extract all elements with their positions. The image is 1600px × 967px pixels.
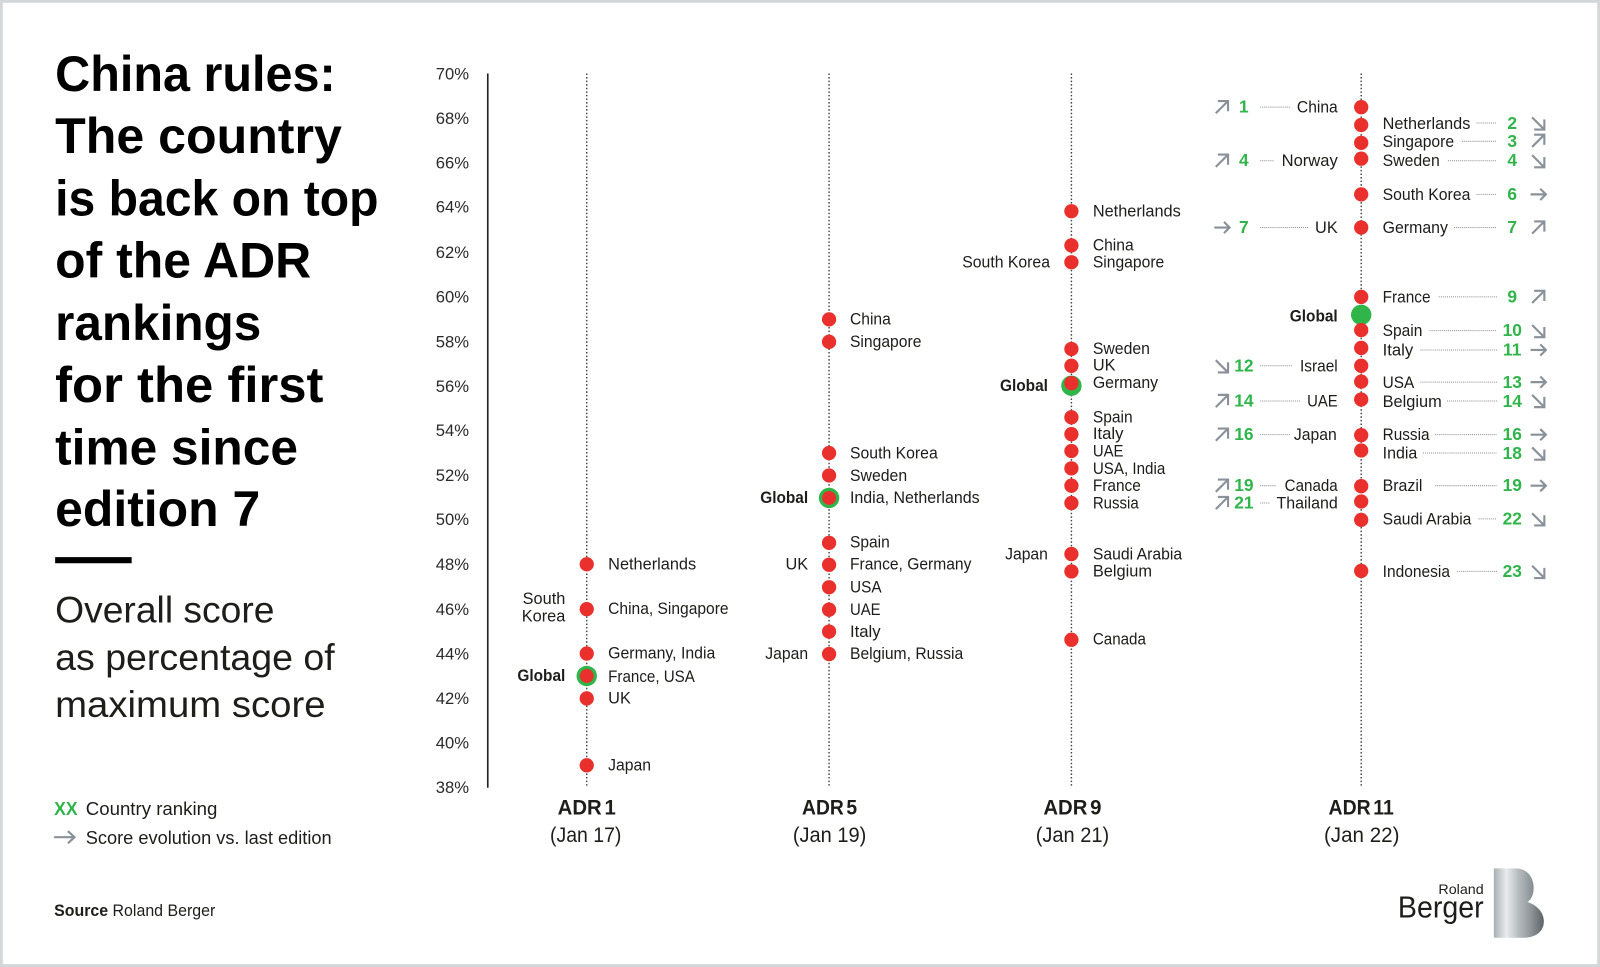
column: ADR11 axis and heading: (Jan 22) <box>1324 824 1399 847</box>
ADR11 right rows: Brazil <box>1383 477 1422 495</box>
ADR11 dots <box>1351 100 1371 578</box>
ADR11 left rows: 21 <box>1234 492 1254 512</box>
ADR11 right rows: 6 <box>1507 184 1517 204</box>
column: ADR5 <box>760 73 980 847</box>
column: ADR9: ADR 9 <box>1043 795 1102 819</box>
y axis: 60% <box>436 288 469 307</box>
ADR11 right rows: Sweden <box>1383 152 1440 170</box>
title: edition 7 <box>55 481 260 537</box>
column: ADR5: South Korea <box>850 444 939 462</box>
ADR11 left rows: 14 <box>1234 390 1254 410</box>
title: for the first <box>55 357 324 413</box>
ADR11 left rows <box>1214 97 1339 512</box>
ADR11 left rows: 19 <box>1234 475 1253 495</box>
column: ADR1: (Jan 17) <box>550 824 621 847</box>
column: ADR5: Spain <box>850 534 890 552</box>
column: ADR5: (Jan 19) <box>793 824 866 847</box>
logo: Roland Berger <box>1398 868 1544 938</box>
ADR11 left rows: UK <box>1315 219 1338 237</box>
column: ADR9: France <box>1093 477 1141 495</box>
column: ADR5: Italy <box>850 623 881 641</box>
ADR11 right rows: Germany <box>1383 219 1449 237</box>
title: time since <box>55 419 298 475</box>
column: ADR5: UK <box>785 556 808 574</box>
ADR11 left rows: 7 <box>1239 217 1249 237</box>
logo: Roland Berger: Roland <box>1438 882 1484 898</box>
column: ADR9: Canada <box>1093 631 1147 649</box>
column: ADR1: France, USA <box>608 668 695 686</box>
column: ADR9: Global <box>1000 377 1048 395</box>
column: ADR1: South <box>523 590 565 608</box>
ADR11 right rows: Singapore <box>1383 133 1454 151</box>
column: ADR1: UK <box>608 689 631 707</box>
ADR11 right rows: Netherlands <box>1383 115 1470 133</box>
ADR11 right rows: Indonesia <box>1383 563 1451 581</box>
ADR11 left rows: Thailand <box>1277 494 1338 512</box>
column: ADR5: China <box>850 310 892 328</box>
column: ADR9: China <box>1093 236 1135 254</box>
y axis: 38% <box>436 778 469 797</box>
ADR11 right rows: 19 <box>1503 475 1522 495</box>
ADR11 left rows: Canada <box>1285 477 1339 495</box>
y axis: 44% <box>436 645 469 664</box>
ADR11 right rows: 14 <box>1503 391 1522 411</box>
ADR11 right rows: 9 <box>1507 286 1517 306</box>
column: ADR5: Sweden <box>850 467 907 485</box>
ADR11 right rows: 16 <box>1503 424 1522 444</box>
ADR11 right rows: 22 <box>1503 508 1522 528</box>
ADR11 left rows: China <box>1297 99 1339 117</box>
y axis: 46% <box>436 600 469 619</box>
ADR11 right rows: Belgium <box>1383 393 1442 411</box>
ADR11 right rows: France <box>1383 288 1431 306</box>
ADR11 right rows: Spain <box>1383 322 1422 340</box>
column: ADR11 axis and heading <box>1324 73 1399 847</box>
title: rankings <box>55 295 261 351</box>
title: of the ADR <box>55 233 311 289</box>
ADR11 right rows: 13 <box>1503 372 1522 392</box>
column: ADR5: Global <box>760 489 808 507</box>
column: ADR9: South Korea <box>962 254 1051 272</box>
ADR11 right rows: 10 <box>1503 320 1522 340</box>
ADR11 left rows: UAE <box>1307 392 1338 410</box>
ADR11 right rows: 2 <box>1507 113 1517 133</box>
ADR11 right rows: India <box>1383 444 1418 462</box>
column: ADR9: Russia <box>1093 494 1140 512</box>
ADR11 left rows: 4 <box>1239 150 1249 170</box>
column: ADR9: Japan <box>1005 545 1048 563</box>
ADR11 right rows: 11 <box>1503 339 1522 359</box>
column: ADR5: Singapore <box>850 333 921 351</box>
column: ADR9: Singapore <box>1093 254 1164 272</box>
subtitle: as percentage of <box>55 637 336 678</box>
y axis: 48% <box>436 555 469 574</box>
column: ADR5: UAE <box>850 601 881 619</box>
ADR11 right rows: 4 <box>1507 150 1517 170</box>
legend <box>54 798 332 848</box>
title: China rules: <box>55 46 336 102</box>
y axis: 58% <box>436 332 469 351</box>
column: ADR9: (Jan 21) <box>1036 824 1109 847</box>
column: ADR5: Japan <box>765 645 808 663</box>
title <box>55 46 379 537</box>
source: Source Roland Berger <box>54 902 216 920</box>
column: ADR1: Global <box>517 667 565 685</box>
legend: XX <box>54 798 78 819</box>
column: ADR9: UAE <box>1093 442 1124 460</box>
y axis: 54% <box>436 421 469 440</box>
column: ADR9: Germany <box>1093 374 1159 392</box>
ADR11 right rows: 7 <box>1507 217 1517 237</box>
ADR11 right rows: 3 <box>1507 131 1517 151</box>
y axis: 40% <box>436 733 469 752</box>
column: ADR9: Spain <box>1093 409 1133 427</box>
column: ADR5: USA <box>850 579 882 597</box>
y axis: 64% <box>436 198 469 217</box>
column: ADR9: Sweden <box>1093 340 1150 358</box>
y axis: 52% <box>436 466 469 485</box>
ADR11 right rows: USA <box>1383 374 1414 392</box>
ADR11 left rows: 1 <box>1239 97 1249 117</box>
column: ADR9: Italy <box>1093 425 1124 443</box>
ADR11 left rows: Israel <box>1300 358 1338 376</box>
column: ADR1: China, Singapore <box>608 600 729 618</box>
y axis: 42% <box>436 689 469 708</box>
column: ADR1 <box>517 73 729 847</box>
ADR11 global label: Global <box>1290 307 1338 325</box>
column: ADR5: Belgium, Russia <box>850 645 964 663</box>
ADR11 left rows: 16 <box>1234 424 1254 444</box>
legend: Score evolution vs. last edition <box>86 827 332 848</box>
ADR11 right rows <box>1383 113 1546 581</box>
column: ADR5: France, Germany <box>850 556 972 574</box>
subtitle: Overall score <box>55 589 275 630</box>
ADR11 right rows: 18 <box>1503 443 1522 463</box>
title: The country <box>55 108 342 164</box>
y axis: 68% <box>436 109 469 128</box>
column: ADR9: Belgium <box>1093 562 1152 580</box>
ADR11 right rows: Saudi Arabia <box>1383 510 1472 528</box>
column: ADR9: UK <box>1093 357 1116 375</box>
column: ADR9: USA, India <box>1093 460 1166 478</box>
ADR11 right rows: 23 <box>1503 561 1522 581</box>
ADR11 right rows: Italy <box>1383 341 1414 359</box>
y axis: 56% <box>436 377 469 396</box>
y axis: 50% <box>436 510 469 529</box>
column: ADR1: Netherlands <box>608 556 696 574</box>
ADR11 left rows: 12 <box>1234 356 1253 376</box>
legend: Country ranking <box>86 798 217 819</box>
y axis: 70% <box>436 65 469 84</box>
ADR11 right rows: South Korea <box>1383 186 1471 204</box>
ADR11 right rows: Russia <box>1383 426 1430 444</box>
title: is back on top <box>55 170 379 226</box>
y axis: 66% <box>436 153 469 172</box>
ADR11 left rows: Norway <box>1282 152 1339 170</box>
y axis <box>436 65 488 797</box>
subtitle <box>55 589 336 725</box>
subtitle: maximum score <box>55 684 326 725</box>
logo: Roland Berger: Berger <box>1398 890 1484 924</box>
y axis: 62% <box>436 243 469 262</box>
column: ADR1: Korea <box>522 608 566 626</box>
column: ADR11 axis and heading: ADR 11 <box>1329 795 1394 819</box>
column: ADR1: Japan <box>608 757 651 775</box>
column: ADR9: Saudi Arabia <box>1093 545 1183 563</box>
ADR11 left rows: Japan <box>1294 426 1337 444</box>
column: ADR5: India, Netherlands <box>850 489 980 507</box>
column: ADR1: Germany, India <box>608 644 716 662</box>
column: ADR5: ADR 5 <box>802 795 857 819</box>
column: ADR9: Netherlands <box>1093 203 1181 221</box>
column: ADR9 <box>962 73 1183 847</box>
column: ADR1: ADR 1 <box>558 795 616 819</box>
